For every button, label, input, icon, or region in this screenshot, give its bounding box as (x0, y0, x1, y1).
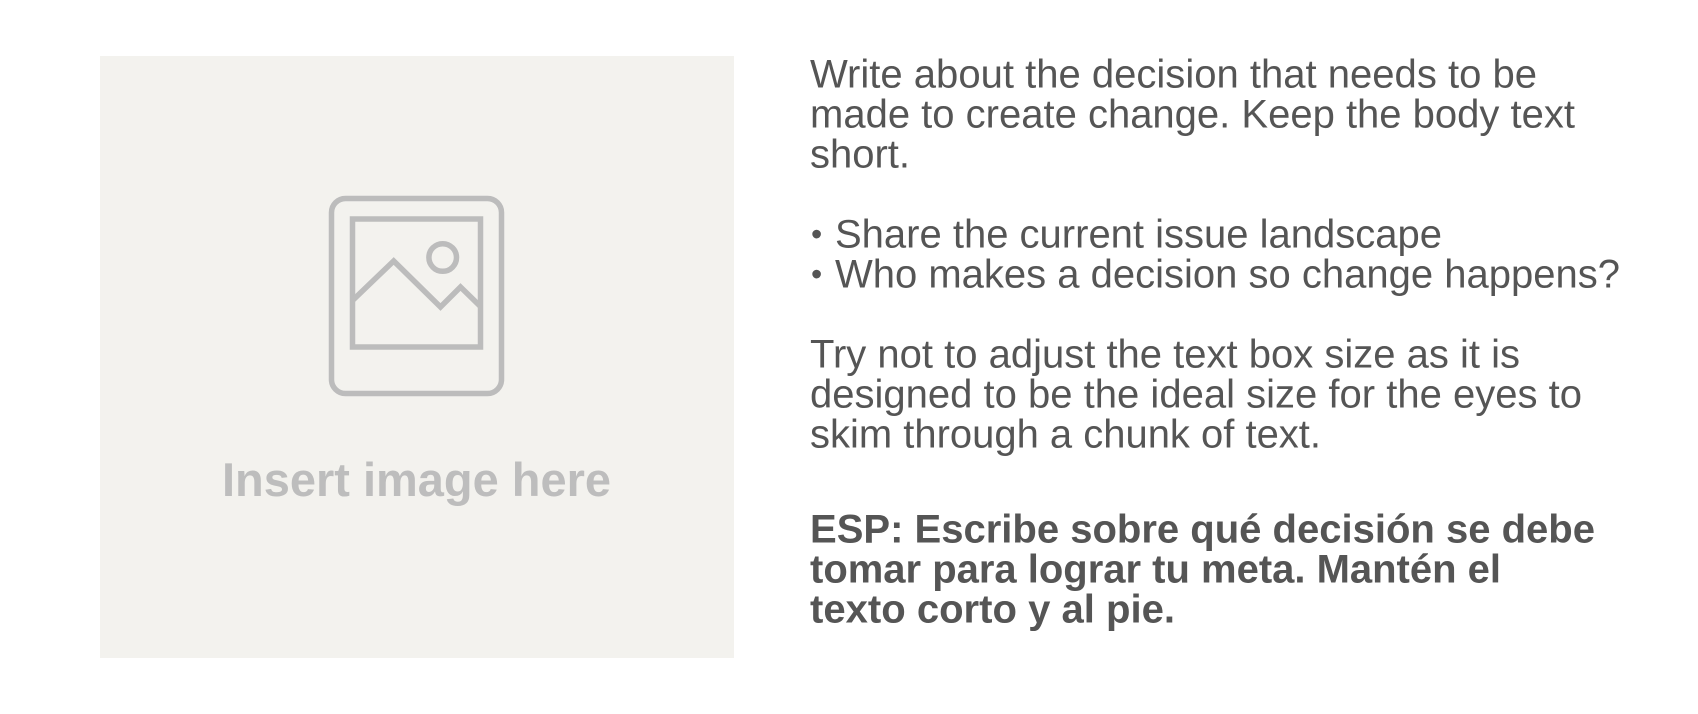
text block: intro: Write about the decision that needs to be (810, 53, 1537, 97)
text block: Spanish bold note: texto corto y al pie. (810, 588, 1175, 632)
text block: intro: short. (810, 133, 910, 177)
text block: guidance: designed to be the ideal size for the eyes to (810, 373, 1582, 417)
text block: intro: made to create change. Keep the body text (810, 93, 1575, 137)
placeholder label: Insert image here (222, 453, 611, 506)
bullet list: • (811, 256, 822, 292)
text block: intro (810, 53, 1575, 177)
text block: Spanish bold note: tomar para lograr tu meta. Mantén el (810, 548, 1501, 592)
bullet list (811, 213, 1620, 297)
text block: Spanish bold note (810, 508, 1595, 632)
bullet list: Who makes a decision so change happens? (835, 253, 1620, 297)
text block: guidance (810, 333, 1582, 457)
panel: image placeholder (100, 56, 734, 658)
text block: Spanish bold note: ESP: Escribe sobre qué decisión se debe (810, 508, 1595, 552)
bullet list: Share the current issue landscape (835, 213, 1442, 257)
text block: guidance: skim through a chunk of text. (810, 413, 1321, 457)
text block: guidance: Try not to adjust the text box size as it is (810, 333, 1520, 377)
icon: image placeholder (332, 198, 502, 394)
bullet list: • (811, 216, 822, 252)
